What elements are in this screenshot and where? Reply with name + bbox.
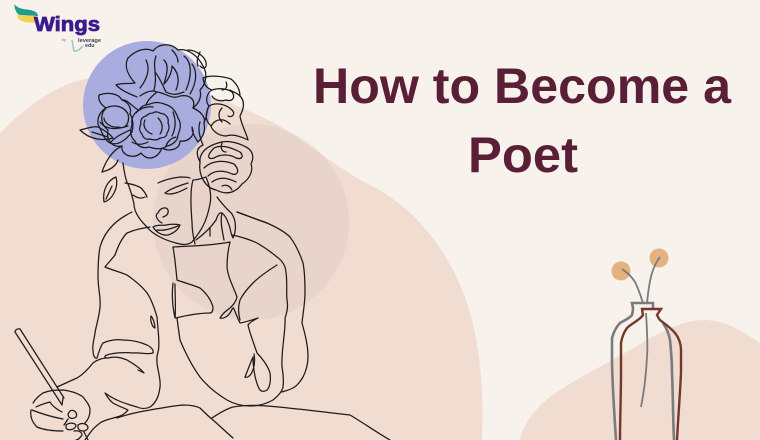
flower head right bbox=[650, 248, 668, 268]
center body bbox=[172, 247, 213, 318]
leaf lower bbox=[102, 146, 122, 172]
flowers: large peony front bbox=[140, 112, 169, 140]
title: Poet bbox=[468, 127, 578, 183]
logo swoosh bbox=[14, 4, 38, 23]
sleeve bbox=[85, 227, 160, 440]
earring leaf bbox=[104, 177, 117, 202]
logo: Wings by Leverage Edu bbox=[14, 4, 101, 51]
leaf left bbox=[80, 127, 113, 139]
flowers: right peony bbox=[203, 76, 248, 140]
purple circle bbox=[83, 41, 211, 169]
title bbox=[313, 58, 732, 183]
logo wordmark: Wings bbox=[34, 14, 100, 36]
right outer arm bbox=[237, 212, 308, 392]
title: How to Become a bbox=[313, 58, 732, 114]
logo byline: by bbox=[62, 38, 66, 42]
brown bottle bbox=[620, 309, 681, 440]
grey bottle bbox=[612, 303, 674, 440]
hand under chin bbox=[196, 212, 235, 240]
flowers: left peony bbox=[98, 93, 133, 144]
logo leverage mark bbox=[72, 40, 83, 51]
flower stems bbox=[622, 257, 660, 407]
pencil bbox=[15, 329, 64, 405]
background circle: grey bbox=[153, 124, 349, 320]
background blob: right bbox=[520, 320, 760, 440]
writing hand bbox=[31, 390, 90, 431]
line art: poet woman with flowers bbox=[15, 45, 390, 440]
flower head left bbox=[612, 262, 630, 280]
logo: Wings by Leverage Edu: edu bbox=[85, 43, 95, 49]
notebook bbox=[117, 405, 390, 440]
neck right bbox=[217, 197, 267, 223]
flowers: lower peony bbox=[200, 142, 253, 193]
left arm outer bbox=[93, 212, 153, 373]
shirt front and loop bbox=[220, 242, 270, 392]
flowers: upper peony bbox=[128, 45, 206, 108]
forearm bbox=[57, 358, 107, 387]
vase with dried flowers bbox=[612, 248, 681, 440]
background blob: left bbox=[0, 76, 482, 440]
logo leverage text: leverage bbox=[78, 38, 101, 44]
face bbox=[123, 163, 211, 244]
